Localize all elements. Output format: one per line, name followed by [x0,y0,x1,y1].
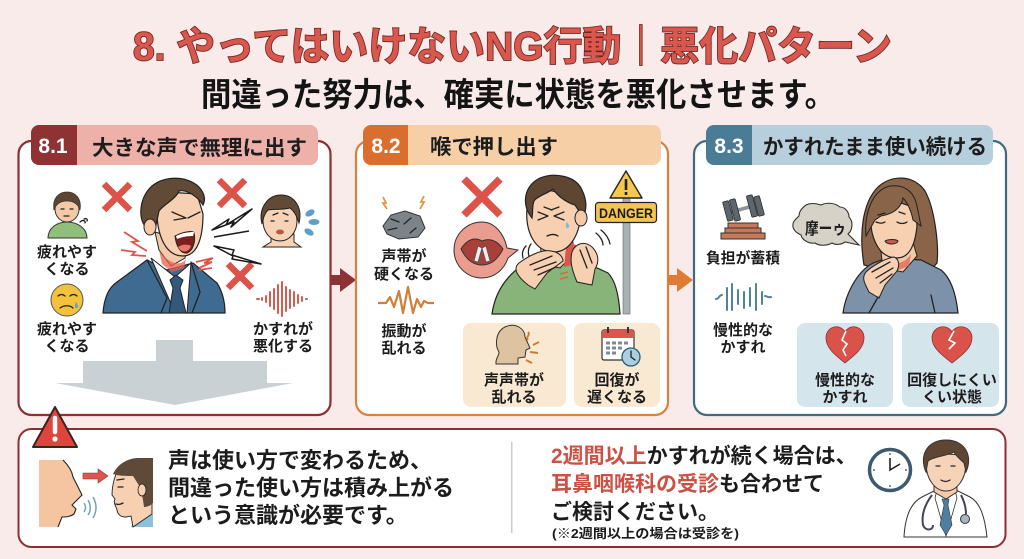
label: hoarseness worsens: 悪化する [253,338,313,355]
label: burden accumulates: 負担が蓄積 [706,249,780,267]
label: slow recovery: 遅くなる [587,389,647,406]
icon: broken heart [826,327,864,363]
text: voice changes with use: という意識が必要です。 [168,503,408,528]
header 8.2 [363,125,661,165]
label: vocal cords harden: 硬くなる [374,266,434,283]
text: voice changes with use: 間違った使い方は積み上がる [168,476,454,500]
arrow: red small [83,469,108,483]
label: hard to recover: 回復しにくい [907,372,997,389]
illustration: man holding throat [492,175,620,314]
header 8.3 [706,125,993,165]
header 8.1 [31,125,318,165]
speech cloud [793,203,859,245]
text: see a doctor after 2 weeks: も合わせて [719,473,824,496]
text: voice changes with use: 声は使い方で変わるため、 [168,448,432,473]
icon: hard rock [383,196,425,239]
label: tired 1: 疲れやす [37,244,97,261]
icon: red waveform [257,282,307,316]
arrow: panel 2 to 3 [668,268,693,292]
text: see a doctor after 2 weeks: ご検討ください。 [551,500,719,524]
header 8.1: 大きな声で無理に出す [92,137,307,160]
label: chronic hoarseness: 慢性的な [815,371,875,389]
icon: X marks [104,180,252,288]
icon: orange sound marks [526,332,539,363]
icon: dumbbell on steps [721,195,765,239]
icon: broken heart [932,327,972,363]
illustration: speaking profile [39,460,82,527]
card: hard to recover [902,323,999,407]
panel: 8.3 keep using while hoarse [694,125,1006,415]
icon: head profile [496,325,530,364]
header 8.3: かすれたまま使い続ける [763,136,987,159]
note: (※2週間以上の場合は受診を) [552,526,739,541]
arrow: grey down arrow [55,340,293,405]
arrow: panel 1 to 2 [331,268,356,292]
panel: bottom note [18,407,1006,547]
speech cloud: 摩ーゥ [805,220,846,238]
label: vocal cords harden: 声帯が [381,247,427,265]
icon: danger sign [596,171,656,314]
label: vibration disturbed: 乱れる [381,340,427,357]
icon: calendar and clock [602,327,640,366]
icon: shout lightning lines [212,209,261,264]
icon: teal waveform [716,284,771,310]
illustration: listening boy [112,458,153,527]
icon: sad emoji [51,284,83,316]
label: chronic hoarseness: かすれ [720,339,766,356]
label: tired 2: くなる [44,338,90,355]
card: slow recovery [574,323,660,407]
icon: tired person [48,192,87,238]
illustration: woman holding throat [843,178,958,313]
divider [511,442,512,533]
label: vocal cords disturbed: 乱れる [491,389,537,406]
label: vocal cords disturbed: 声声帯が [484,371,544,389]
icon: sound waves [84,497,96,518]
header 8.2: 喉で押し出す [430,136,558,159]
header 8.2: 8.2 [371,135,401,158]
icon: clock [870,450,910,490]
icon: danger sign: DANGER [599,205,653,221]
header 8.1: 8.1 [38,135,68,158]
label: chronic hoarseness: かすれ [822,389,868,406]
label: chronic hoarseness: 慢性的な [713,321,773,339]
header 8.3: 8.3 [714,135,744,158]
illustration: worried listener [261,195,301,247]
crack [842,331,847,356]
panel: 8.1 loud voice [18,125,330,415]
illustration: doctor [904,440,987,537]
title: 8. やってはいけないNG行動｜悪化パターン [133,25,892,69]
crack [949,331,955,349]
text: see a doctor after 2 weeks: 耳鼻咽喉科の受診 [551,473,719,496]
illustration: shouting man in suit [103,178,225,313]
icon: warning triangle [33,407,77,447]
label: tired 1: くなる [44,261,90,278]
icon: red pain sparks [121,232,213,270]
label: slow recovery: 回復が [594,371,640,389]
label: hoarseness worsens: かすれが [253,320,313,338]
subtitle: 間違った努力は、確実に状態を悪化させます。 [201,76,835,113]
text: see a doctor after 2 weeks: 2週間以上かすれが続く場合は、 [551,445,857,468]
panel: 8.2 push from throat [356,125,668,415]
card: vocal cords disturbed [463,323,566,407]
card: chronic hoarseness [797,323,893,407]
label: tired 2: 疲れやす [37,321,97,338]
label: hard to recover: くい状態 [922,388,982,406]
icon: orange rough wave [378,287,434,313]
icon: X mark [464,179,500,215]
icon: sweat drops [303,208,320,237]
label: vibration disturbed: 振動が [381,322,427,340]
illustration: throat bubble [454,222,518,278]
